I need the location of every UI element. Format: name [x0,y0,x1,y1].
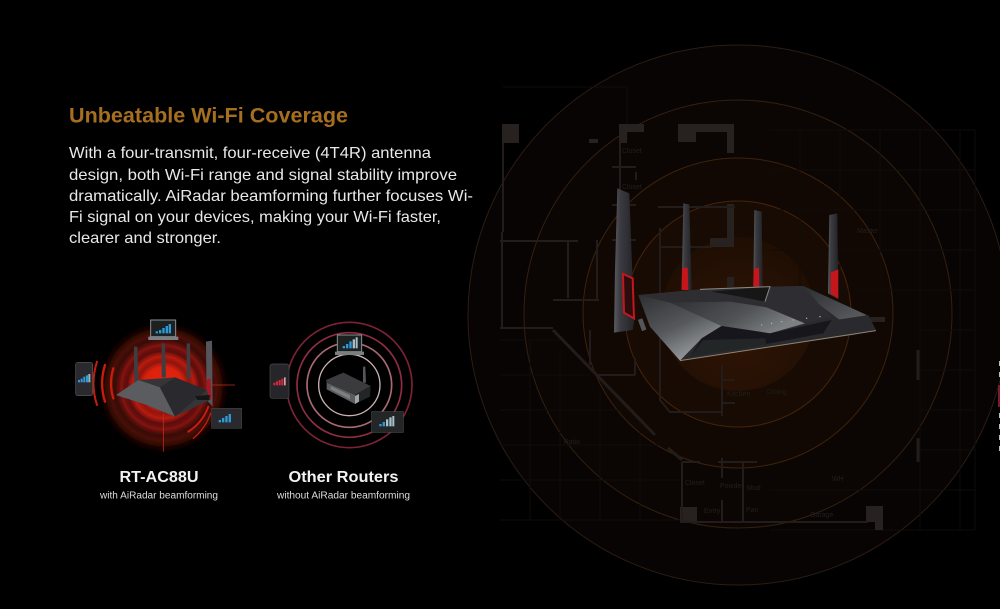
body text: With a four-transmit, four-receive (4T4R) antenna [69,145,431,162]
icon: tablet [372,412,403,432]
box router [326,367,371,404]
body text: Fi signal on your devices, making your Wi-Fi faster, [69,209,441,226]
antenna 4 [828,213,838,299]
router chassis [638,286,876,361]
floor plan [500,87,975,530]
floor plan: Kitchen [727,391,750,398]
floor plan: Closet [685,480,705,487]
label: RT-AC88U: RT-AC88U [120,469,198,486]
icon: laptop [335,335,364,355]
floor plan: Master [857,228,879,235]
diagram: other routers [270,322,412,502]
icon: phone [76,362,93,396]
diagram: RT-AC88U with beamforming [76,320,242,502]
caption: without AiRadar beamforming: without AiRadar beamforming [276,490,410,502]
body text: clearer and stronger. [69,230,221,247]
icon: laptop [148,320,178,340]
body text: dramatically. AiRadar beamforming further focuses Wi- [69,188,473,205]
floor plan: Closet [622,148,642,155]
concentric rings [287,322,412,448]
cropped edge graphic [998,361,1000,451]
large router photo [614,188,876,361]
red signal glow [98,322,228,452]
icon: tablet [212,408,242,428]
antenna 3 [753,210,763,287]
caption: with AiRadar beamforming: with AiRadar beamforming [99,490,218,502]
floor plan: Powder [720,483,744,490]
floor plan: Mud [747,485,761,492]
title: Unbeatable Wi-Fi Coverage [69,104,348,128]
beam arcs toward tablet [188,407,211,438]
small router [116,341,213,417]
floor plan: Garage [810,512,833,519]
antenna 2 [682,203,692,290]
floor plan: WH [832,476,844,483]
body text [69,145,473,247]
floor plan: Patio [564,439,580,446]
label: Other Routers: Other Routers [288,469,399,486]
icon: phone [270,364,289,398]
floor plan: Entry [704,508,721,515]
body text: design, both Wi-Fi range and signal stability improve [69,167,457,184]
beam arcs toward phone [94,362,113,405]
floor plan: Closet [622,184,642,191]
crosshair lines [163,385,235,452]
antenna 1 [614,188,635,333]
floor plan: Dining [767,389,787,396]
floor plan: Pan [746,507,759,514]
signal rings background [468,45,1000,585]
